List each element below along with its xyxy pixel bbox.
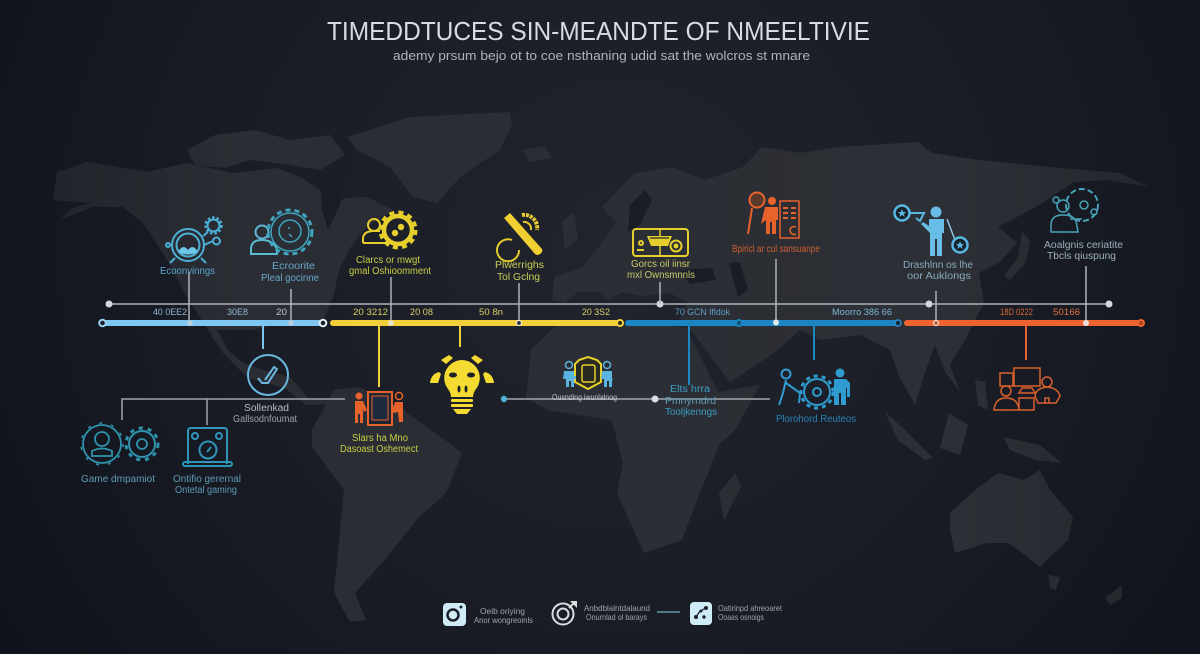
label xyxy=(903,260,973,282)
legend item: data rating xyxy=(443,603,533,626)
date labels: 20 xyxy=(276,307,287,318)
milestone: check badge xyxy=(233,355,297,425)
label: Plorohord Reuteos xyxy=(776,414,856,425)
connectors up xyxy=(189,259,1086,323)
label: Pleal gocinne xyxy=(261,273,319,284)
icon xyxy=(183,428,232,466)
icon xyxy=(894,206,968,256)
milestone label: three lines xyxy=(665,384,717,418)
label: Tbcls qiuspung xyxy=(1047,251,1116,262)
date labels: 70 GCN Ifldok xyxy=(675,307,730,318)
land: Australia xyxy=(950,470,1073,567)
date labels: Moorro 386 66 xyxy=(832,307,892,318)
label: Tol Gclng xyxy=(497,272,540,283)
land: Greenland xyxy=(347,112,512,203)
world map xyxy=(53,112,1149,622)
label: Plwerrighs xyxy=(495,260,544,271)
label xyxy=(349,255,431,277)
title: TIMEDDTUCES SIN-MEANDTE OF NMEELTIVIE xyxy=(327,16,870,46)
land: Africa xyxy=(526,322,760,553)
icon xyxy=(1051,189,1098,232)
legend item: target xyxy=(552,601,650,624)
land: Madagascar xyxy=(719,473,741,520)
subtitle: ademy prsum bejo ot to coe nsthaning udid sat the wolcros st mnare xyxy=(393,49,810,63)
upper white timeline xyxy=(106,300,1112,308)
label xyxy=(495,260,544,283)
legend divider xyxy=(657,611,680,613)
land: Eurasia xyxy=(552,142,1149,405)
label xyxy=(627,259,695,281)
land: British Isles xyxy=(562,212,578,250)
milestone: orange people with tablet xyxy=(340,392,418,455)
icon xyxy=(779,368,850,408)
label: Slars ha Mno xyxy=(352,433,408,444)
sea: Caspian xyxy=(729,262,748,297)
label: Bpiricl ar cul sansuanpe xyxy=(732,244,820,255)
milestone: person gear xyxy=(251,210,319,284)
icon: light bulb xyxy=(430,355,494,414)
main timeline bar xyxy=(99,320,1144,326)
label: Ousnding iwunlalnog xyxy=(552,393,617,402)
label: oor Auklongs xyxy=(907,271,971,282)
icon xyxy=(552,601,577,624)
sea: Black Sea xyxy=(680,268,716,284)
land: Iceland xyxy=(522,146,552,162)
date labels: 20 3212 xyxy=(353,307,388,318)
sea: Baltic xyxy=(628,190,652,232)
icon xyxy=(355,392,403,425)
icon xyxy=(497,213,542,261)
land: Tasmania and New Zealand xyxy=(1048,575,1122,605)
milestone label: three lines: Tooljkenngs xyxy=(665,407,717,418)
milestone: blue people with shield xyxy=(552,357,617,402)
label: Gorcs oil iinsr xyxy=(631,259,691,270)
date labels: 20 08 xyxy=(410,307,433,318)
text: Anbdblalntdalaund xyxy=(584,603,650,613)
label: Aoalgnis ceriatite xyxy=(1044,240,1123,251)
milestone label: three lines: Elts hrra xyxy=(670,384,710,395)
end caps and markers xyxy=(99,320,1144,326)
date labels: 30E8 xyxy=(227,307,248,318)
icon xyxy=(633,229,688,256)
icon xyxy=(166,218,222,263)
legend item: nodes xyxy=(690,602,783,625)
milestone: game department xyxy=(81,423,158,485)
label: gmal Oshioomment xyxy=(349,266,431,277)
milestone: clock gear xyxy=(160,218,222,277)
connectors down xyxy=(263,323,1026,387)
milestone label: three lines: Pmnyrndrd xyxy=(665,396,716,407)
icon xyxy=(690,602,712,625)
land: Southeast Asia islands xyxy=(885,380,1062,463)
date labels xyxy=(153,307,1080,318)
label: Ecoonvinngs xyxy=(160,266,215,277)
text xyxy=(584,603,650,622)
sea: Hudson Bay xyxy=(320,178,345,230)
icon xyxy=(563,357,613,389)
label xyxy=(1044,240,1123,262)
land: Japan xyxy=(1004,232,1030,280)
segment: blue xyxy=(625,320,899,326)
label: Gallsodnfoumat xyxy=(233,414,297,425)
milestone: laptop xyxy=(173,428,241,496)
icon xyxy=(748,192,799,238)
segment: orange xyxy=(904,320,1141,326)
icon xyxy=(363,212,416,248)
milestone: yellow wrench xyxy=(495,213,544,283)
text: Anor wongreoinls xyxy=(474,615,533,625)
text: Oatirinpd ahreoaret xyxy=(718,603,783,613)
land: North America xyxy=(53,162,393,405)
date labels: 50 8n xyxy=(479,307,503,318)
label xyxy=(340,433,418,455)
land: Arctic islands xyxy=(187,130,345,170)
segment: light blue xyxy=(103,320,323,326)
icon xyxy=(248,355,288,395)
label: Ontifio gerernal xyxy=(173,474,241,485)
icon xyxy=(994,368,1060,410)
text: Ooaas osnoigs xyxy=(718,612,764,622)
date labels: 18D 0222 xyxy=(1000,307,1033,318)
label: mxl Ownsmnnls xyxy=(627,270,695,281)
label: Ontetal gaming xyxy=(175,485,237,496)
icon xyxy=(81,423,158,465)
second branch line xyxy=(501,396,770,402)
date labels: 20 3S2 xyxy=(582,307,610,318)
label xyxy=(261,261,319,284)
land: South America xyxy=(312,387,462,622)
milestone: teal person gears xyxy=(1044,189,1123,262)
milestone: blue person with stars xyxy=(894,206,973,282)
inland seas xyxy=(320,178,748,297)
label: Ecroorite xyxy=(272,261,315,272)
text: Onurnlad ol barays xyxy=(586,612,647,622)
label: Clarcs or mwgt xyxy=(356,255,420,266)
label xyxy=(173,474,241,496)
milestone: yellow device xyxy=(627,229,695,281)
label: Drashlnn os lhe xyxy=(903,260,973,271)
icon xyxy=(251,210,312,254)
segment: yellow xyxy=(330,320,621,326)
text xyxy=(474,606,533,625)
label: Dasoast Oshemect xyxy=(340,444,418,455)
branch line xyxy=(122,399,345,425)
milestone: orange person with chart xyxy=(732,192,820,255)
milestone: orange computer team xyxy=(994,368,1060,410)
date labels: 50166 xyxy=(1053,307,1080,318)
text: Oeib oriying xyxy=(480,606,525,616)
label: Sollenkad xyxy=(244,403,289,414)
icon xyxy=(443,603,466,626)
text xyxy=(718,603,783,622)
milestone: blue people with gear xyxy=(776,368,856,425)
date labels: 40 0EE2 xyxy=(153,307,187,318)
label xyxy=(233,403,297,425)
milestone: yellow person gear xyxy=(349,212,431,277)
label: Game dmpamiot xyxy=(81,474,155,485)
legend xyxy=(443,601,783,626)
